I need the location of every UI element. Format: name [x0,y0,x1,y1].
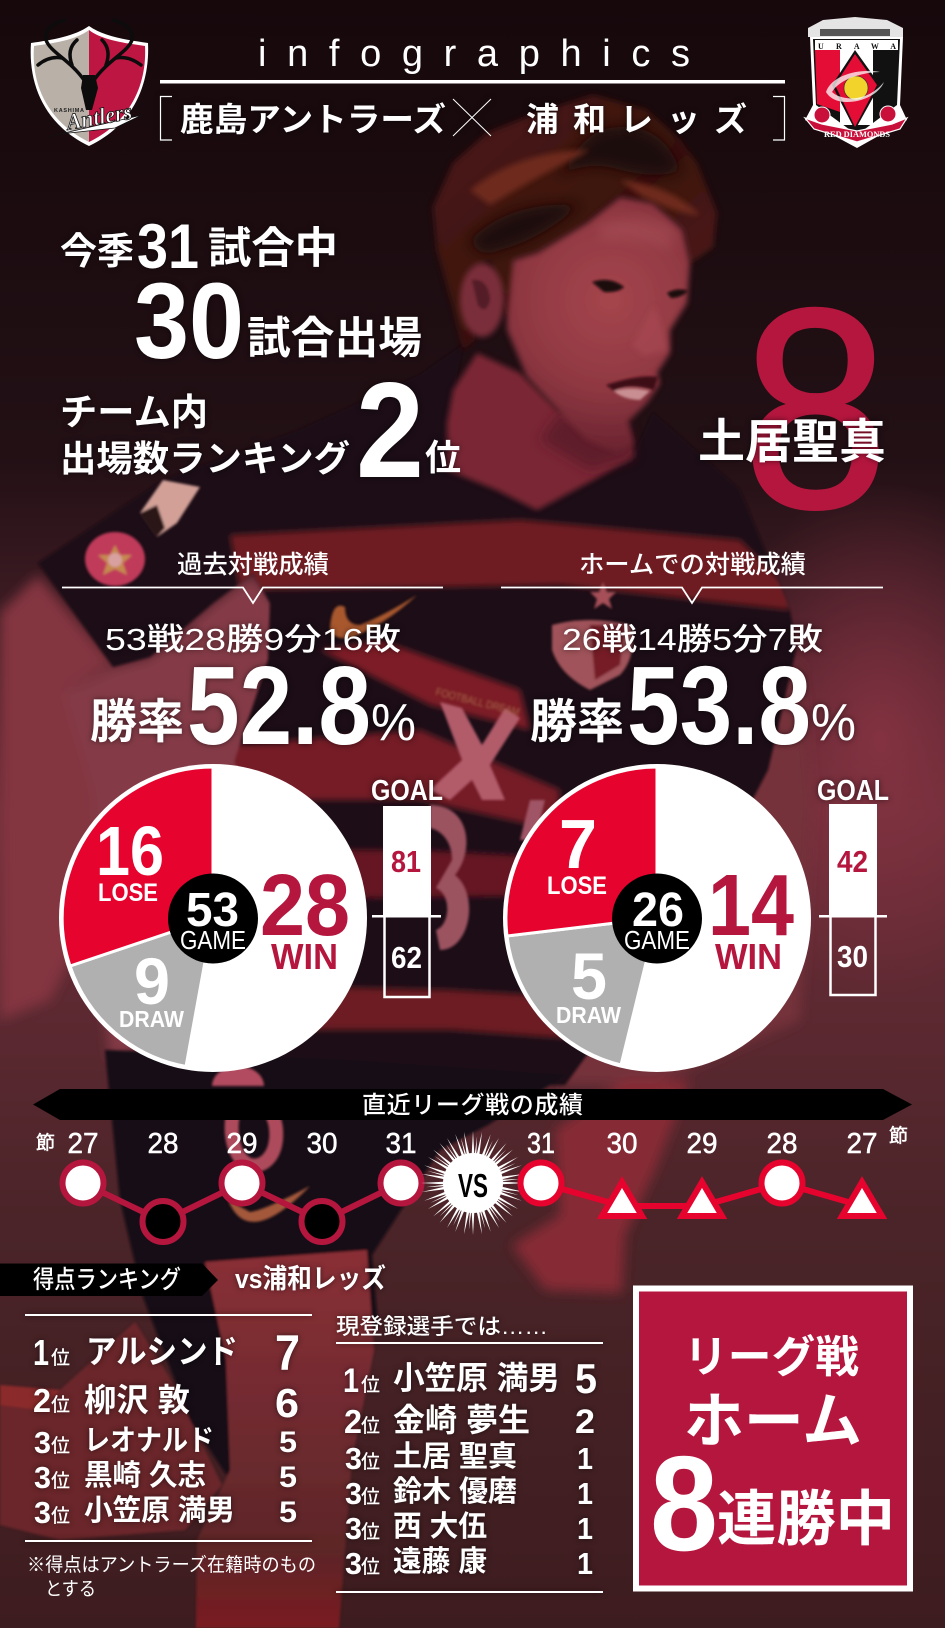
heading: infographics [160,33,785,84]
goal bar: GOAL [371,775,443,807]
goal bar: 30 [837,939,868,974]
shirt marks [212,582,632,1222]
callout: 8 straight home wins: 連勝中 [717,1486,895,1553]
heading: matchup: 鹿島アントラーズ [180,101,446,138]
table: current squad scorers: 1 [577,1546,593,1581]
heading: home record: ホームでの対戦成績 [579,551,806,579]
goal bar: 62 [391,940,422,975]
pie chart: 7 [559,805,597,883]
table: all-time scorers: 3 [34,1425,51,1460]
win rate: 52.8 [187,644,371,768]
record summary: 53戦28勝9分16敗 [105,622,401,657]
eyes, nose and mouth [592,280,688,400]
pie chart: 5 [571,939,607,1013]
table: current squad scorers: 金崎 夢生 [393,1402,530,1438]
round numbers: 節 [36,1132,55,1154]
heading: past record: 過去対戦成績 [177,551,329,579]
pie chart: 53 [186,884,239,937]
pie chart: WIN [715,936,782,977]
wordmark: KASHIMA [54,108,84,114]
table: all-time scorers: 位 [51,1470,70,1492]
pie chart: 16 [96,812,164,890]
table: all-time scorers: 6 [275,1380,299,1426]
round numbers: 節 [889,1125,908,1147]
stat: appearances [60,212,422,381]
table: current squad scorers: 2 [344,1403,362,1440]
stat: team ranking: 出場数ランキング [60,438,350,479]
round numbers: 31 [527,1128,555,1160]
knee [196,1250,374,1628]
pie chart: GAME [180,925,246,955]
heading: vs Urawa: vs浦和レッズ [235,1263,386,1294]
stat: appearances: 今季 [60,231,134,272]
round numbers: 29 [226,1128,258,1160]
callout: 8 straight home wins [636,1288,910,1588]
pie chart: 14 [708,857,794,954]
table: all-time scorers: 2 [33,1382,51,1419]
pie chart: 26 [632,884,684,937]
round numbers: 31 [386,1128,416,1160]
win rate: 53.8 [627,644,811,768]
table: current squad scorers: 3 [345,1511,362,1546]
table: current squad scorers: 遠藤 康 [393,1545,487,1578]
logo: Urawa Red Diamonds [805,17,907,148]
logo: Kashima Antlers [31,20,148,146]
timeline: Urawa recent results [520,1125,908,1216]
pie chart: LOSE [98,879,158,907]
thigh [0,1322,222,1540]
icon: VS starburst: VS [458,1167,488,1204]
table: current squad scorers: 現登録選手では…… [336,1314,548,1339]
footnote [27,1554,316,1600]
pie chart [503,764,811,1072]
round numbers [527,1125,908,1160]
callout: 8 straight home wins: 8 [650,1428,718,1579]
panel: all-time record [59,551,443,1072]
table: all-time scorers: 位 [51,1394,70,1416]
table: current squad scorers: 2 [575,1403,595,1441]
win rate: % [371,694,416,752]
callout: 8 straight home wins: リーグ戦 [684,1333,859,1382]
table: current squad scorers: 3 [345,1441,362,1476]
neck [447,353,633,510]
heading: past record [62,551,443,603]
sleeve patches [85,480,200,586]
tag: scoring ranking [0,1264,218,1296]
table: current squad scorers: 西 大伍 [393,1510,487,1543]
table: all-time scorers: 小笠原 満男 [84,1494,235,1527]
table: current squad scorers: 1 [577,1476,593,1511]
pie chart: WIN [271,936,338,977]
table: current squad scorers: 1 [343,1362,359,1400]
table: current squad scorers: 位 [361,1486,380,1508]
footnote: ※得点はアントラーズ在籍時のもの [27,1554,316,1576]
table: all-time scorers: 1 [33,1332,49,1373]
table: all-time scorers: 3 [34,1495,51,1530]
round numbers: 28 [148,1128,178,1160]
round numbers: 29 [686,1128,718,1160]
table: all-time scorers: 位 [51,1347,70,1369]
banner: recent league form: 直近リーグ戦の成績 [362,1092,583,1119]
table: current squad scorers: 位 [361,1521,380,1543]
table: current squad scorers: 3 [345,1476,362,1511]
goal bar [817,775,889,995]
win rate: 勝率 [90,695,184,748]
face [507,197,690,453]
goal bar: GOAL [817,775,889,807]
logo: Urawa Red Diamonds: RED DIAMONDS [824,130,891,139]
table: current squad scorers: 位 [361,1451,380,1473]
shorts [105,1050,565,1480]
antlers [38,20,141,80]
win rate: 勝率 [530,695,624,748]
table: current squad scorers: 小笠原 満男 [393,1360,560,1396]
goal bar: 42 [837,844,868,879]
round numbers: 27 [846,1128,878,1160]
shirt [38,345,796,1085]
round numbers [36,1128,416,1160]
table: all-time scorers: 5 [279,1426,297,1459]
pie chart: DRAW [556,1002,621,1028]
hair [433,95,717,350]
table: current squad scorers: 1 [577,1441,593,1476]
stat: appearances: 31 [137,212,199,282]
tag: scoring ranking: 得点ランキング [33,1266,181,1294]
player number and name: 土居聖真 [698,415,886,468]
heading: infographics: infographics [258,33,690,75]
banner: recent league form [33,1089,912,1120]
pie chart: 28 [260,857,350,954]
table: all-time scorers: 3 [34,1460,51,1495]
table: all-time scorers [25,1314,312,1542]
shirt marks: FOOTBALL DREAM [434,686,521,719]
round numbers: 30 [306,1128,338,1160]
round numbers: 27 [68,1128,98,1160]
pie chart: 9 [134,944,170,1018]
icon: VS starburst [421,1131,525,1235]
ribbon [805,118,907,142]
round numbers: 30 [606,1128,638,1160]
table: all-time scorers: 7 [275,1325,300,1381]
panel: home record [501,551,889,1072]
table: current squad scorers: 土居 聖真 [393,1440,517,1473]
record summary: 26戦14勝5分7敗 [562,622,823,657]
timeline: Kashima recent results [36,1128,422,1242]
pie chart: GAME [624,925,690,955]
pie chart: LOSE [547,872,607,900]
table: all-time scorers: 位 [51,1505,70,1527]
table: all-time scorers: 位 [51,1435,70,1457]
table: current squad scorers: 1 [577,1511,593,1546]
stat: team ranking: 位 [425,437,461,478]
heading: matchup [160,96,784,140]
table: all-time scorers: 柳沢 敦 [84,1382,190,1418]
pie chart: DRAW [119,1006,184,1032]
logo: Urawa Red Diamonds: URAWA [818,42,896,51]
ear [460,263,504,337]
pie chart [59,764,367,1072]
far arm [560,660,812,1085]
table: all-time scorers: 5 [279,1461,297,1494]
goal bar: 81 [391,844,421,879]
footnote: とする [45,1579,96,1600]
stat: team ranking [60,354,461,506]
table: current squad scorers: 位 [361,1556,380,1578]
table: all-time scorers: アルシンド [86,1333,238,1370]
round numbers: 28 [766,1128,798,1160]
win rate [90,644,416,768]
table: all-time scorers: 黒崎 久志 [84,1459,206,1492]
table: all-time scorers: レオナルド [84,1425,214,1457]
stat: appearances: 30 [134,260,244,381]
goal bar [371,775,443,997]
stat: appearances: 試合出場 [247,314,422,363]
callout: 8 straight home wins: ホーム [684,1388,862,1455]
table: current squad scorers: 位 [361,1374,380,1396]
arm and gap behind torso [63,573,290,1060]
win rate [530,644,856,768]
heading: matchup: 浦和レッズ [526,101,747,138]
table: current squad scorers: 位 [361,1415,380,1437]
table: current squad scorers [336,1314,603,1593]
win rate: % [811,694,856,752]
stat: team ranking: チーム内 [60,392,208,433]
player number and name: 8 [742,250,889,568]
logo: Kashima Antlers: Antlers [63,99,134,135]
stat: appearances: 試合中 [208,225,338,273]
table: current squad scorers: 3 [345,1546,362,1581]
heading: home record [501,551,883,603]
table: current squad scorers: 鈴木 優磨 [393,1475,517,1508]
stat: team ranking: 2 [356,354,424,506]
table: all-time scorers: 5 [279,1496,297,1529]
table: current squad scorers: 5 [575,1355,597,1402]
